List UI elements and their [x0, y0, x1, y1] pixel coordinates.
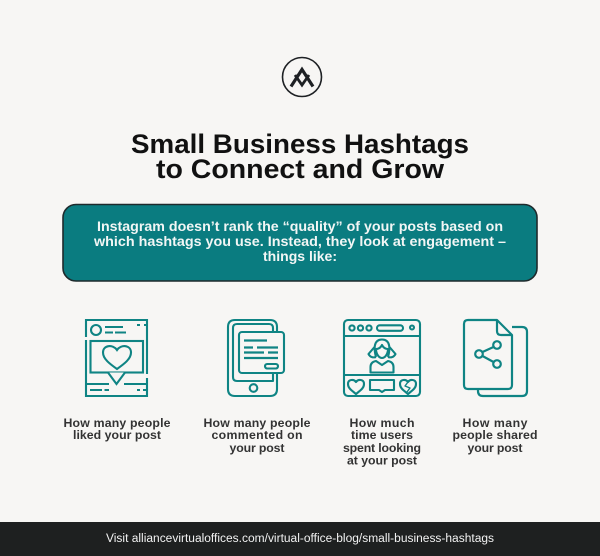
caption: time spent: spent looking	[343, 441, 421, 455]
icon: liked post	[86, 320, 147, 396]
icon: browser with user	[344, 320, 420, 396]
icon: comments on phone	[228, 320, 284, 396]
intro text: Instagram doesn’t rank the “quality” of your posts based on	[97, 218, 503, 234]
caption: shared: your post	[468, 441, 522, 455]
caption: shared	[452, 416, 538, 455]
title: to Connect and Grow	[156, 154, 445, 184]
footer link text: Visit alliancevirtualoffices.com/virtual-office-blog/small-business-hashtags	[106, 533, 494, 545]
caption: commented: your post	[230, 441, 284, 455]
caption: time spent: How much	[350, 416, 414, 430]
caption: shared: people shared	[452, 428, 538, 442]
intro text	[93, 218, 506, 264]
caption: shared: How many	[462, 416, 528, 430]
caption: commented: How many people	[204, 416, 311, 430]
caption: time spent: at your post	[347, 454, 417, 468]
footer bar	[0, 522, 600, 556]
caption: time spent: time users	[351, 428, 413, 442]
icon: shared document	[464, 320, 527, 396]
caption: liked: liked your post	[73, 428, 161, 442]
caption: commented	[204, 416, 311, 455]
caption: liked	[64, 416, 171, 442]
caption: time spent	[343, 416, 421, 468]
logo	[282, 58, 322, 96]
intro text: things like:	[263, 248, 337, 264]
panel: intro callout	[63, 204, 537, 281]
intro text: which hashtags you use. Instead, they look at engagement –	[93, 233, 506, 249]
caption: liked: How many people	[64, 416, 171, 430]
title	[131, 129, 469, 184]
caption: commented: commented on	[212, 428, 302, 442]
title: Small Business Hashtags	[131, 129, 469, 159]
